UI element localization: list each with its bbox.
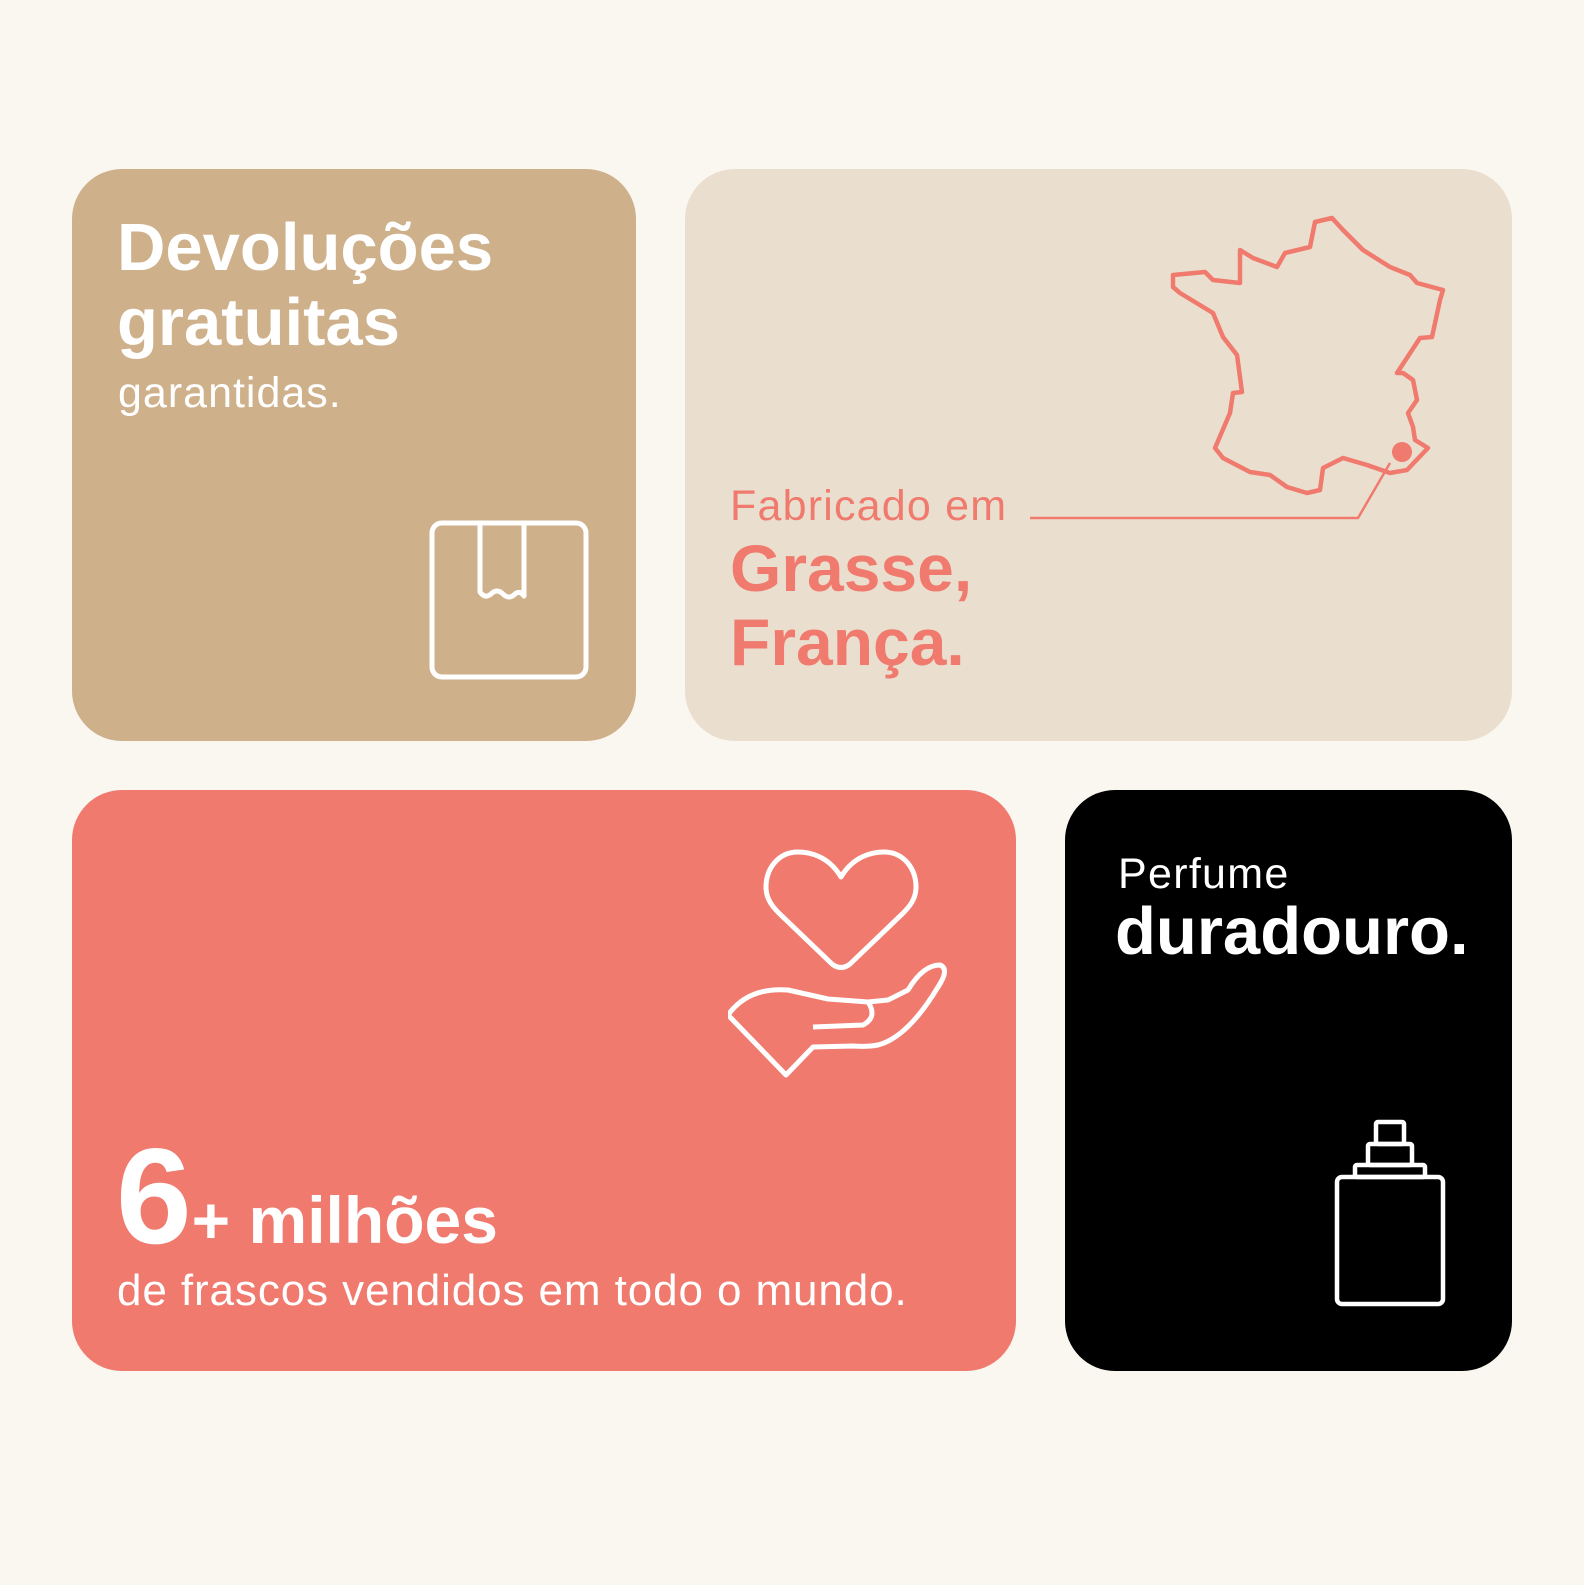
icon: perfume bottle [1334,1120,1446,1306]
heading: Devoluções gratuitas: gratuitas [117,285,400,360]
label: Perfume: Perfume [1118,850,1290,898]
panel: made in Grasse [685,169,1512,741]
heading: Grasse, França [730,531,972,679]
icon: box [430,520,588,680]
stat: 6+ milhões: 6+ milhões [116,1120,498,1272]
subtext: de frascos vendidos: de frascos vendidos em todo o mundo. [117,1266,908,1315]
heading: duradouro: duradouro. [1115,894,1469,969]
heading: Devoluções gratuitas [117,210,493,360]
heading: Grasse, França: França. [730,605,965,679]
heading: Grasse, França: Grasse, [730,531,972,605]
panel: long-lasting perfume [1065,790,1512,1371]
panel: 6+ million bottles [72,790,1016,1371]
heading: Devoluções gratuitas: Devoluções [117,210,493,285]
icon: heart in hand [728,850,948,1078]
label: Fabricado em: Fabricado em [730,482,1007,530]
panel: free returns [72,169,636,741]
subtext: garantidas: garantidas. [118,369,342,417]
